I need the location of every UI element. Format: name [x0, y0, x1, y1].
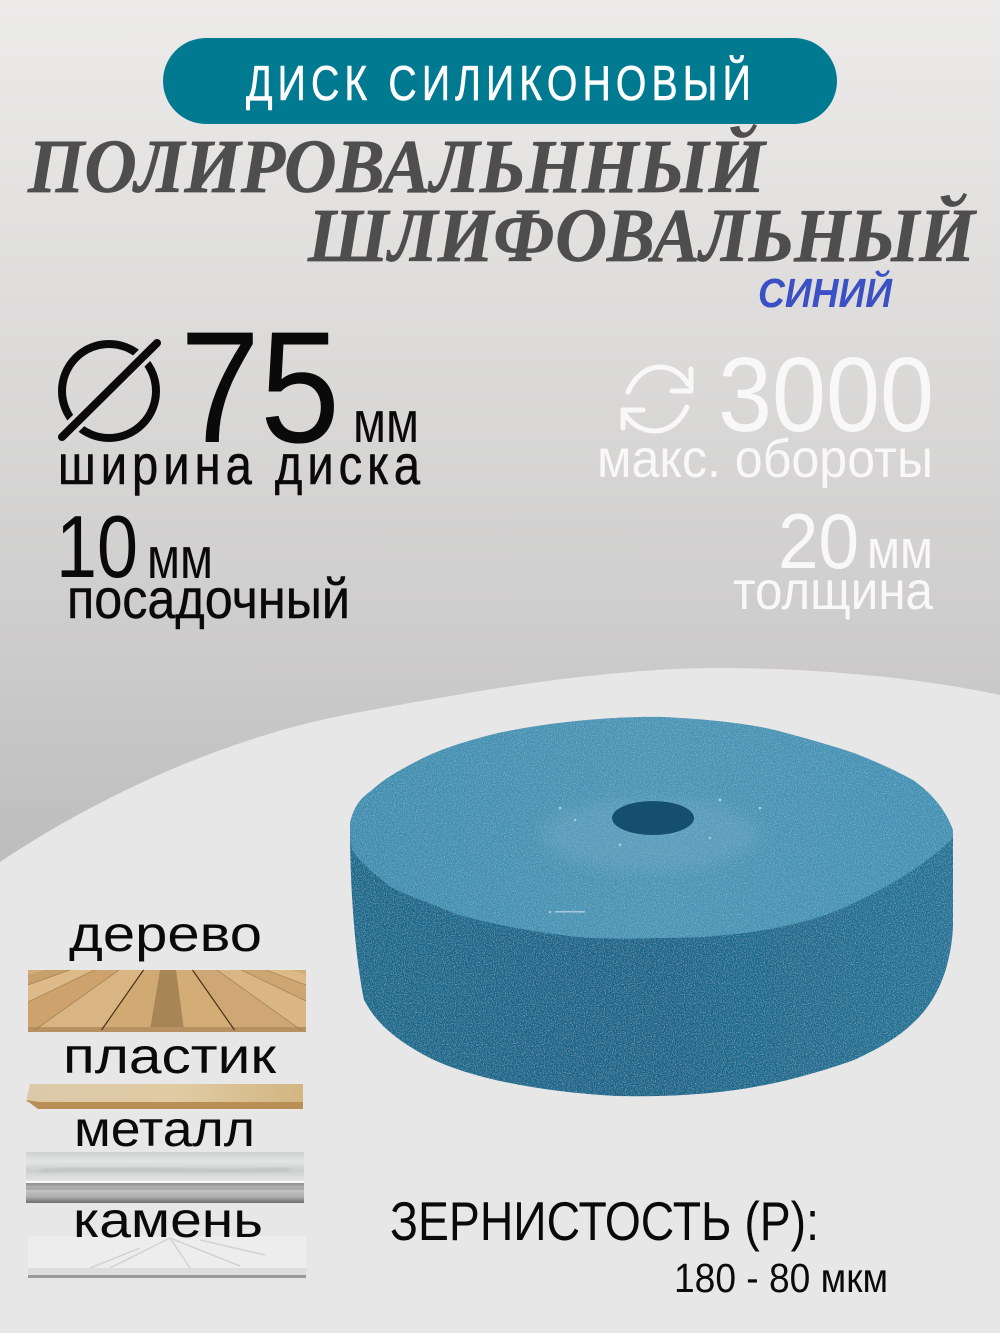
metal swatch — [26, 1152, 304, 1203]
label plastic: пластик — [63, 1028, 277, 1084]
background gradient — [0, 0, 1000, 862]
product: blue silicone disc — [350, 717, 953, 1096]
spec: bore — [56, 497, 350, 630]
material: stone — [28, 1192, 306, 1278]
disc side — [350, 830, 953, 1096]
label stone: камень — [73, 1192, 263, 1248]
unit mm: мм — [147, 526, 213, 591]
material: plastic — [26, 1028, 303, 1109]
grit heading: ЗЕРНИСТОСТЬ (Р): — [390, 1190, 819, 1252]
colour label: СИНИЙ — [758, 269, 893, 316]
label metal: металл — [74, 1101, 255, 1157]
surface specks — [549, 798, 761, 913]
title pill — [163, 38, 837, 124]
stone swatch — [28, 1236, 306, 1278]
value 20: 20 — [778, 497, 859, 585]
grit range: 180 - 80 мкм — [674, 1255, 888, 1301]
spec: thickness — [733, 497, 934, 621]
disc top face — [350, 717, 953, 939]
worn highlight around hole — [540, 799, 760, 871]
unit mm: мм — [353, 390, 419, 455]
spec: disc width — [58, 298, 420, 496]
heading: polishing: ПОЛИРОВАЛЬННЫЙ — [27, 124, 768, 209]
plastic swatch — [26, 1084, 303, 1109]
heading: grinding: ШЛИФОВАЛЬНЫЙ — [307, 193, 978, 278]
label wood: дерево — [69, 906, 262, 962]
title pill: ДИСК СИЛИКОНОВЫЙ — [246, 55, 751, 111]
unit mm: мм — [867, 518, 933, 580]
centre bore hole — [612, 801, 694, 835]
icon: rotation arrows — [623, 367, 691, 431]
bore caption: посадочный — [67, 567, 350, 630]
material: wood — [28, 906, 306, 1032]
material: metal — [26, 1101, 304, 1203]
rpm caption: макс. обороты — [597, 429, 933, 489]
light curved lower panel — [0, 668, 1000, 1333]
value 3000: 3000 — [718, 336, 934, 454]
spec: max rpm — [597, 336, 934, 489]
thickness caption: толщина — [733, 561, 934, 621]
icon: diameter — [62, 343, 157, 438]
wood plank swatch — [28, 970, 306, 1032]
value 75: 75 — [180, 298, 340, 476]
value 10: 10 — [56, 497, 138, 596]
width caption: ширина диска — [58, 433, 420, 496]
